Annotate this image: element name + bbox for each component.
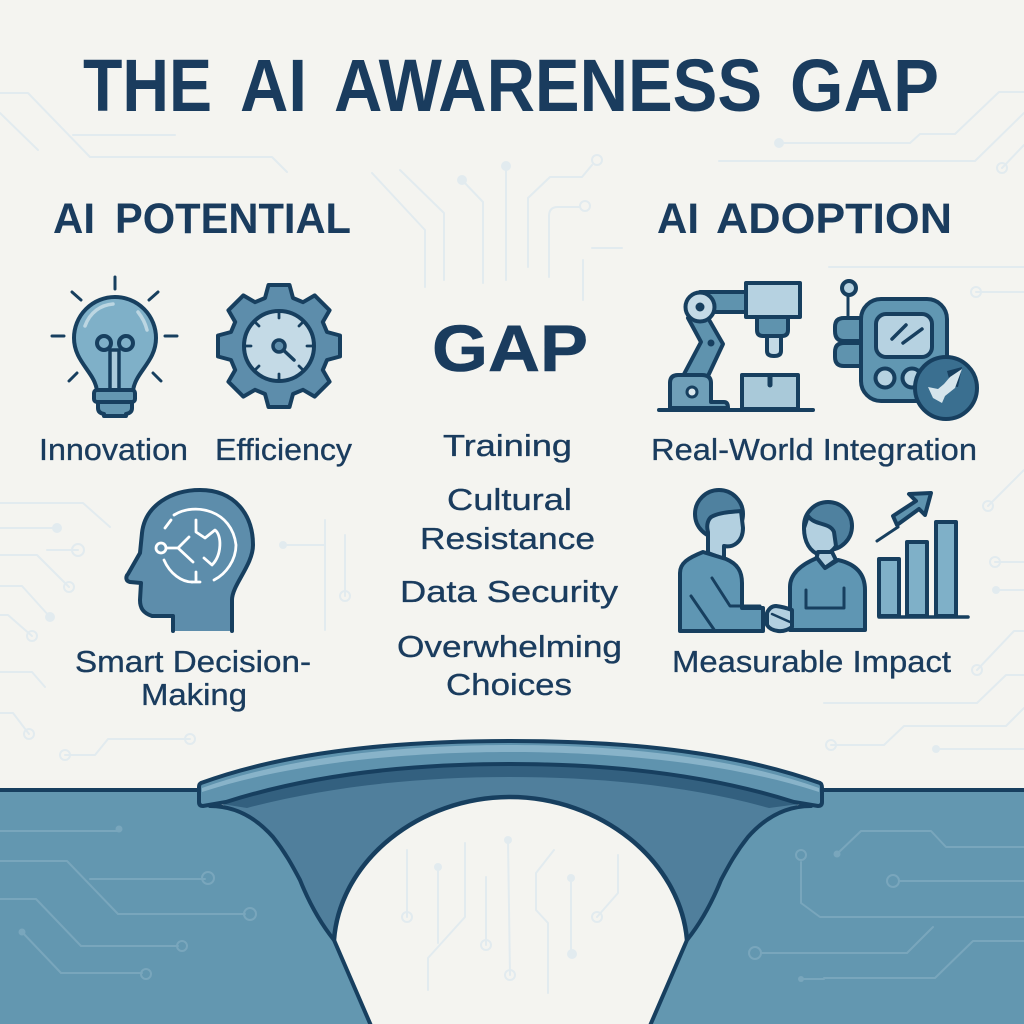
panel: AI adoption items bbox=[651, 281, 977, 679]
label: Cultural Resistance: Resistance bbox=[420, 521, 595, 556]
icon: light bulb bbox=[52, 277, 177, 416]
label: Overwhelming Choices: Choices bbox=[446, 667, 572, 702]
label: Cultural Resistance: Cultural bbox=[447, 482, 572, 517]
right cliff bbox=[649, 790, 1024, 1024]
label: Cultural Resistance bbox=[420, 482, 595, 556]
title: THE bbox=[83, 44, 212, 127]
title bbox=[83, 44, 939, 127]
spandrel under deck bbox=[222, 762, 799, 940]
title: GAP bbox=[790, 44, 939, 127]
icon: people shaking hands bbox=[680, 490, 865, 631]
bridge illustration bbox=[0, 741, 1024, 1024]
label: Training: Training bbox=[443, 428, 572, 463]
bridge deck shadow band bbox=[222, 762, 799, 808]
icon: robot arm bbox=[659, 283, 813, 410]
label: Smart Decision-Making: Smart Decision- bbox=[75, 644, 311, 679]
icon: gear with gauge bbox=[218, 285, 340, 407]
heading: AI Adoption: ADOPTION bbox=[716, 195, 952, 243]
left cliff bbox=[0, 790, 372, 1024]
label: Data Security: Data Security bbox=[400, 574, 619, 609]
heading: AI Potential: POTENTIAL bbox=[115, 195, 351, 243]
label: Smart Decision-Making bbox=[75, 644, 311, 712]
label: Real-World Integration: Real-World Integration bbox=[651, 432, 977, 467]
heading: Gap: GAP bbox=[432, 311, 588, 385]
heading: AI Adoption: AI bbox=[657, 195, 699, 243]
label: Efficiency: Efficiency bbox=[215, 432, 353, 467]
icon: head with decision paths bbox=[126, 490, 253, 631]
label: Measurable Impact: Measurable Impact bbox=[672, 644, 951, 679]
label: Smart Decision-Making: Making bbox=[141, 677, 247, 712]
icon: device with badge bbox=[835, 281, 977, 419]
heading: AI Potential: AI bbox=[53, 195, 95, 243]
panel: AI potential items bbox=[39, 277, 353, 712]
bridge deck bbox=[199, 741, 822, 806]
title: AI bbox=[240, 44, 307, 127]
icon: rising bar chart with arrow bbox=[877, 493, 968, 617]
label: Overwhelming Choices: Overwhelming bbox=[397, 629, 622, 664]
panel: gap barriers bbox=[397, 311, 622, 702]
title: AWARENESS bbox=[334, 44, 762, 127]
label: Innovation: Innovation bbox=[39, 432, 188, 467]
label: Overwhelming Choices bbox=[397, 629, 622, 702]
arch outline bbox=[334, 797, 687, 940]
